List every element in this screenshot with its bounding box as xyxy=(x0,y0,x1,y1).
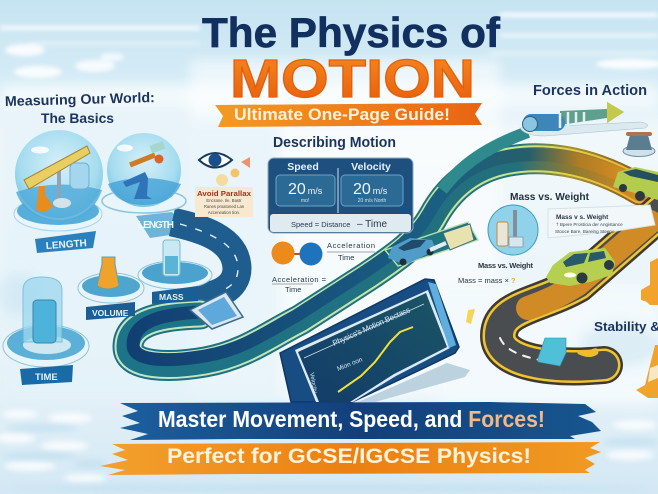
formula: mass vs weight: Mass = mass × ? xyxy=(458,276,516,285)
text: acceleration xyxy=(327,241,375,262)
road: blue measuring road xyxy=(136,212,238,299)
panel: mass vs weight card: Mass v s. Weight xyxy=(556,214,609,221)
device: motion graph monitor: Physics's Motion Bectass xyxy=(331,305,412,348)
speed value: 20m/s xyxy=(288,181,323,198)
chart line xyxy=(338,327,413,392)
pedestal: mass xyxy=(138,240,212,289)
label: length two: LENGTH xyxy=(138,220,174,231)
panel: speed and velocity: – Time xyxy=(357,219,387,230)
text: acceleration: Time xyxy=(338,253,354,262)
road: teal curve to orange xyxy=(128,155,640,365)
heading: measuring our world: Measuring Our World: xyxy=(5,89,155,109)
callout: avoid parallax: Avoid Parallax xyxy=(197,189,252,198)
label: length one: LENGTH xyxy=(45,238,87,252)
velocity value xyxy=(341,175,403,206)
formula: Speed = Distance xyxy=(291,220,350,229)
label: time: TIME xyxy=(35,372,58,383)
callout: avoid parallax xyxy=(195,187,253,217)
green car xyxy=(546,248,615,286)
panel: speed and velocity xyxy=(268,158,413,233)
device: motion graph monitor: Velocity xyxy=(308,372,318,394)
subtitle ribbon: Ultimate One-Page Guide! xyxy=(234,106,450,124)
pedestal: time xyxy=(3,277,89,367)
heading: measuring our world xyxy=(5,89,155,126)
callout: avoid parallax: Encsone. Ile. Bastr xyxy=(206,198,242,203)
icon: mass globe xyxy=(488,205,538,255)
formula: acceleration: Time xyxy=(285,285,301,294)
heading: forces in action: Forces in Action xyxy=(533,83,647,99)
label: volume xyxy=(86,302,135,320)
panel: mass vs weight card xyxy=(548,205,655,238)
title xyxy=(202,9,501,109)
road: orange forces road xyxy=(499,208,658,366)
icon: upper orange cone xyxy=(641,258,658,305)
heading: measuring our world: The Basics xyxy=(41,110,114,126)
icon: eye xyxy=(199,153,250,186)
formula: acceleration: Acceleration = xyxy=(272,275,327,284)
label: time xyxy=(20,365,73,385)
formula: mass vs weight: Mass vs. Weight xyxy=(478,261,534,270)
panel: speed and velocity: Speed xyxy=(287,161,319,173)
icon: small platform xyxy=(623,132,655,156)
banner: orange: Perfect for GCSE/IGCSE Physics! xyxy=(167,445,531,468)
subtitle ribbon xyxy=(215,103,482,127)
speed value xyxy=(276,175,335,206)
label: volume: VOLUME xyxy=(92,308,129,318)
flask xyxy=(36,186,53,211)
banner: blue: Master Movement, Speed, and Forces! xyxy=(158,406,545,432)
label: length one xyxy=(35,231,96,253)
callout: avoid parallax: Ranes proatoned Lan xyxy=(204,204,245,209)
ruler xyxy=(24,146,90,189)
icon: green car top xyxy=(613,167,658,201)
road: side platform xyxy=(385,222,478,266)
heading: describing motion: Describing Motion xyxy=(273,134,396,151)
heading: mass vs weight: Mass vs. Weight xyxy=(510,191,589,203)
label: mass xyxy=(152,286,198,304)
title: MOTION xyxy=(230,49,475,109)
formula: mass vs weight xyxy=(458,261,534,285)
device: motion graph monitor xyxy=(280,279,470,402)
pedestal: length ruler globe xyxy=(14,129,104,231)
velocity value: 20 m/s North xyxy=(358,198,387,204)
device: motion graph monitor: Mion oon xyxy=(336,356,364,373)
banner: orange xyxy=(100,442,601,475)
icon: force arrow spring xyxy=(520,102,648,136)
icon: lower orange cone xyxy=(636,345,658,398)
pedestal: volume xyxy=(78,257,144,303)
panel: speed and velocity: Velocity xyxy=(351,161,391,173)
icon: tablet xyxy=(190,292,243,329)
road: upper ramp xyxy=(442,132,528,190)
icon: turquoise block xyxy=(466,309,598,366)
icon: acceleration balls xyxy=(272,242,322,266)
panel: mass vs weight card: Stooce Bare, Bareing Steene xyxy=(555,229,615,234)
title: The Physics of xyxy=(202,9,501,56)
label: mass: MASS xyxy=(159,292,184,302)
heading: stability: Stability & xyxy=(594,319,658,334)
panel: mass vs weight card: † Bpere Prosticia der Angistance xyxy=(556,222,623,227)
speed value: mɑ! xyxy=(301,198,309,204)
icon: cylinder on road xyxy=(430,224,474,250)
callout: avoid parallax: Acceneation tion. xyxy=(208,210,240,215)
text: acceleration: Acceleration xyxy=(327,241,375,250)
pedestal: microscope globe xyxy=(102,132,186,213)
icon: blue car xyxy=(388,238,436,266)
banner: blue xyxy=(120,402,601,440)
velocity value: 20m/s xyxy=(353,181,388,198)
formula: acceleration xyxy=(272,275,327,294)
